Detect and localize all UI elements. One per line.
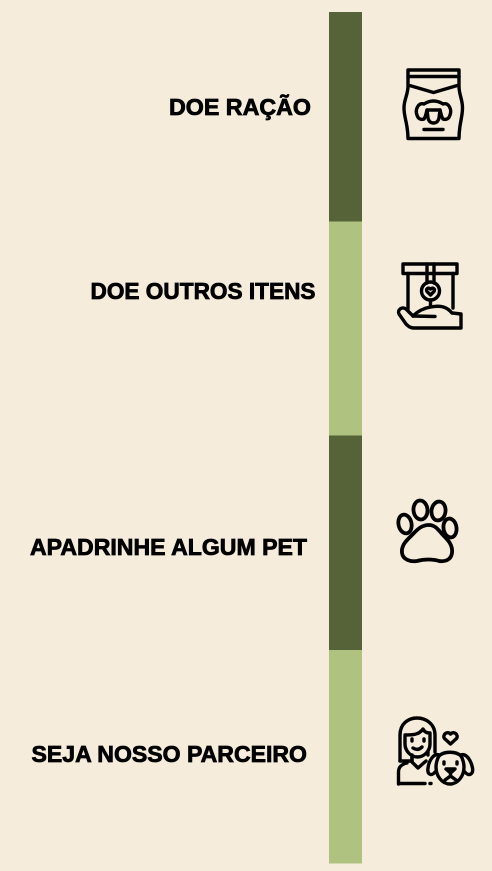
icon: gift box on open hand [399,264,461,328]
label: doe outros itens: DOE OUTROS ITENS [90,278,316,304]
vertical segmented bar [329,12,362,864]
icon: woman with dog [398,718,473,784]
label: seja nosso parceiro: SEJA NOSSO PARCEIRO [32,741,307,767]
label: apadrinhe algum pet: APADRINHE ALGUM PET [30,534,307,560]
icon: paw print [397,500,458,561]
label: doe ração: DOE RAÇÃO [169,93,311,120]
icon: bag of pet food [404,70,462,138]
